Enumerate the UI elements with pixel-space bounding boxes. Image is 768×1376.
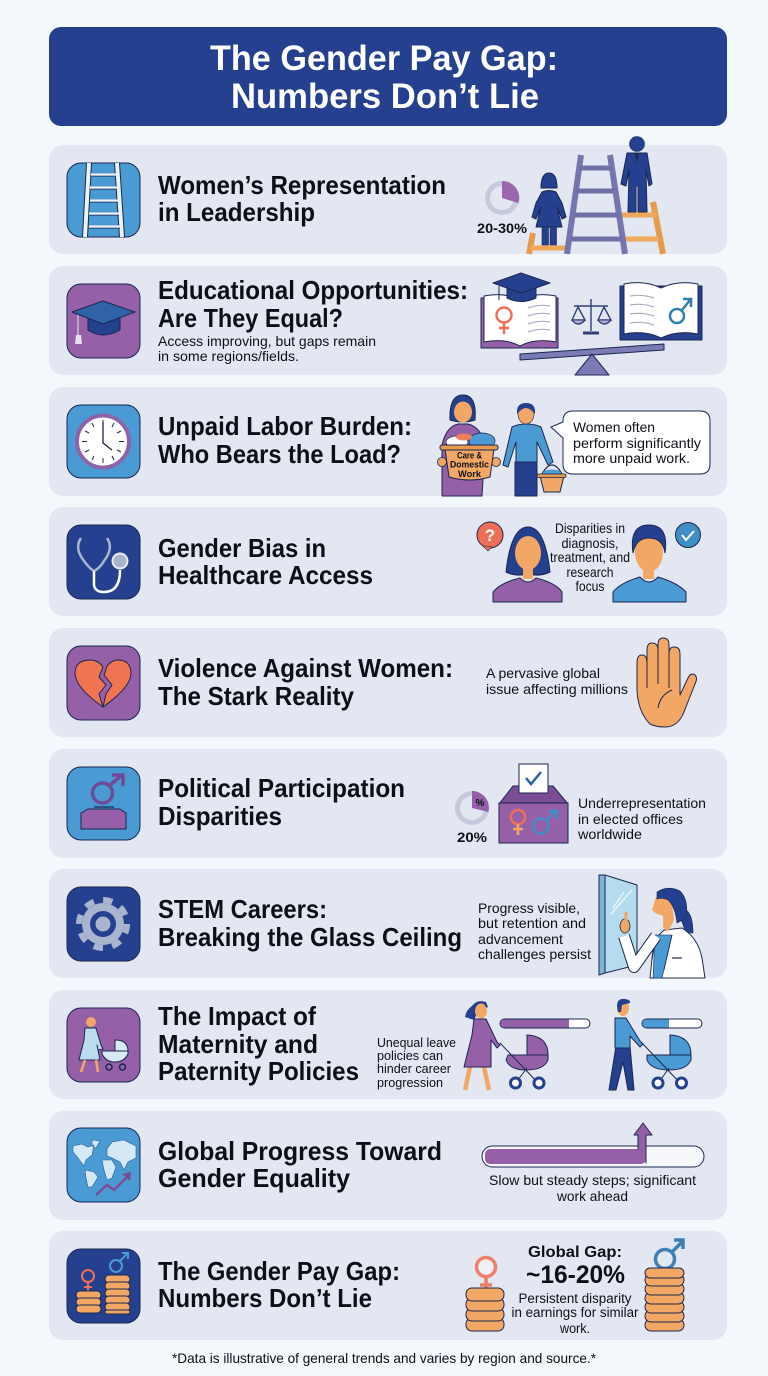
heading: Violence Against Women: [158,653,453,683]
panel: educational opportunities [49,266,727,375]
heading [158,170,446,227]
illustration: graduation cap on book [493,273,550,302]
icon: gear [67,887,140,961]
heading: Gender Equality [158,1163,351,1193]
heading: in Leadership [158,197,315,227]
icon: coins with gender symbols [67,1249,140,1323]
text: disparities in healthcare: research [566,564,614,580]
text: retention and advancement: Progress visible, [478,900,580,916]
panel: political participation [49,749,727,858]
illustration: woman carrying basket [438,395,500,496]
text: underrepresentation: in elected offices [578,811,683,827]
text: disparities in healthcare: treatment, and [550,549,630,565]
text: unequal leave policies: hinder career [377,1061,452,1076]
text: slow but steady: work ahead [556,1188,628,1204]
heading: Breaking the Glass Ceiling [158,922,462,952]
heading and description: Educational Opportunities: [158,275,468,305]
heading [158,1256,400,1313]
heading: Women’s Representation [158,170,446,200]
chart: leadership share donut [477,181,528,236]
callout: unpaid work speech bubble [551,411,710,474]
heading: Paternity Policies [158,1056,359,1086]
text: slow but steady: Slow but steady steps; significant [489,1172,696,1188]
heading and description [158,275,468,364]
text: unequal leave policies: Unequal leave [377,1035,456,1050]
heading: Unpaid Labor Burden: [158,411,412,441]
illustration: man carrying small basket [503,403,566,496]
heading and description: in some regions/fields. [158,348,299,364]
text: retention and advancement: but retention and [478,915,586,931]
text: retention and advancement: challenges persist [478,946,591,962]
panel: women's representation in leadership [49,136,727,254]
icon: male symbol over ballot box [67,767,140,840]
stat: global gap figure: Global Gap: [528,1244,622,1261]
heading: Disparities [158,801,282,831]
panel: gender pay gap [49,1231,727,1340]
icon: raised hand [637,638,696,727]
stat: global gap figure: in earnings for similar [512,1305,639,1320]
icon: graduation cap [67,284,140,358]
illustration: ballot box [499,764,568,843]
callout: unpaid work speech bubble: Women often [573,419,655,435]
chart: progress bar with arrow [482,1123,704,1167]
heading and description: Are They Equal? [158,303,343,333]
text: retention and advancement: advancement [478,931,563,947]
illustration: woman carrying basket: Care & [457,450,482,460]
heading and description: Access improving, but gaps remain [158,333,376,349]
icon: world map with rising arrow [67,1128,140,1202]
text: disparities in healthcare: focus [576,578,604,594]
footnote: *Data is illustrative of general trends and varies by region and source.* [172,1350,597,1366]
stat: global gap figure: ~16-20% [526,1261,625,1289]
heading: Political Participation [158,773,405,803]
text: unequal leave policies: policies can [377,1048,443,1063]
title banner [49,27,727,126]
heading: Who Bears the Load? [158,439,401,469]
text: unequal leave policies: progression [377,1075,443,1090]
illustration: scientist in lab coat [620,888,705,978]
illustration: tall coin stack with male symbol [645,1240,684,1331]
icon: broken heart [67,646,140,720]
heading: Healthcare Access [158,560,373,590]
title banner: Numbers Don’t Lie [231,77,539,116]
illustration: glass pane [599,875,637,975]
icon: ladder [67,163,140,237]
illustration: short coin stack with female symbol [466,1258,504,1331]
chart: elected office share donut: % [476,798,485,809]
chart: elected office share donut [457,791,489,845]
text: underrepresentation: Underrepresentation [578,795,706,811]
heading: The Gender Pay Gap: [158,1256,400,1286]
heading [158,1136,442,1193]
illustration: balance seesaw [520,344,664,375]
callout: unpaid work speech bubble: perform significantly [573,435,701,451]
chart: leadership share donut: 20-30% [477,220,528,236]
text: disparities in healthcare [550,520,630,594]
panel: violence against women [49,628,727,737]
panel: global progress [49,1111,727,1220]
heading [158,1001,359,1086]
heading: Global Progress Toward [158,1136,442,1166]
illustration: open book with female symbol [481,295,558,348]
illustration: father with stroller and short leave bar [609,999,702,1090]
icon: clock [67,405,140,478]
heading: STEM Careers: [158,894,327,924]
illustration: woman carrying basket: Domestic [450,460,489,470]
heading: Numbers Don’t Lie [158,1283,372,1313]
heading [158,533,373,590]
heading: The Stark Reality [158,681,354,711]
heading: The Impact of [158,1001,316,1031]
text: unequal leave policies [377,1035,456,1090]
text: pervasive global issue: issue affecting millions [486,681,628,697]
illustration: woman and man on ladders [529,136,663,254]
illustration: woman patient with question mark [477,522,562,602]
heading: Gender Bias in [158,533,326,563]
heading [158,894,462,952]
heading [158,411,412,469]
illustration: woman patient with question mark: ? [485,526,495,545]
text: slow but steady [489,1172,696,1204]
text: underrepresentation [577,795,706,842]
text: pervasive global issue: A pervasive global [486,665,600,681]
text: pervasive global issue [486,665,628,697]
illustration: man patient with check mark [613,522,700,602]
stat: global gap figure: work. [559,1321,590,1336]
illustration: woman carrying basket: Work [458,469,482,479]
illustration: open book with male symbol [620,283,702,340]
stat: global gap figure: Persistent disparity [518,1291,632,1306]
panel: unpaid labor burden [49,387,727,496]
chart: elected office share donut: 20% [457,829,488,845]
icon: stethoscope [67,525,140,599]
panel: maternity and paternity policies [49,990,727,1099]
stat: global gap figure [512,1244,639,1336]
heading [158,653,453,711]
text: disparities in healthcare: diagnosis, [562,535,618,551]
illustration: scales of justice [572,299,611,333]
illustration: mother with stroller and long leave bar [464,1001,590,1090]
heading: Maternity and [158,1029,318,1059]
text: underrepresentation: worldwide [577,826,642,842]
callout: unpaid work speech bubble: more unpaid work. [573,450,690,466]
icon: person with stroller [67,1008,140,1082]
panel: STEM careers [49,869,727,978]
text: retention and advancement [478,900,591,962]
heading [158,773,405,831]
title banner: The Gender Pay Gap: [210,39,558,78]
panel: gender bias in healthcare [49,507,727,616]
text: disparities in healthcare: Disparities in [555,520,625,536]
